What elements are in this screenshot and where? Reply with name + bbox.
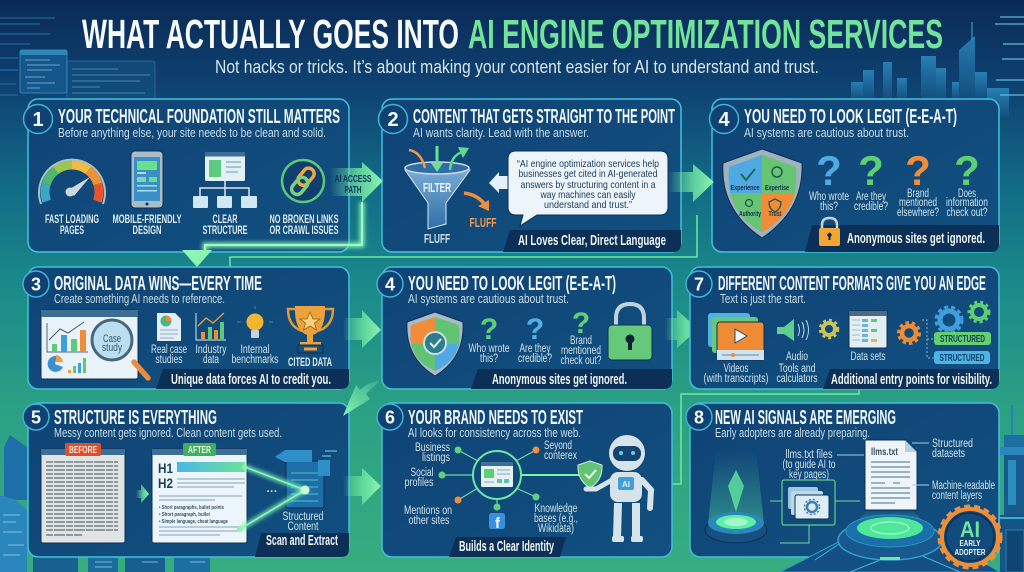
arrow: panel 4 to panel 7 [665, 310, 698, 348]
label: internal benchmarks: benchmarks [232, 354, 279, 366]
panel: 7 content formats [686, 267, 999, 389]
question: brand mentioned: ? [905, 147, 931, 194]
question: information check: check out? [946, 207, 988, 219]
label: tools and calculators: Tools and [778, 363, 816, 375]
node: social profiles [404, 467, 446, 489]
question: who wrote this: Who wrote [809, 191, 849, 203]
label: industry data: Industry [196, 344, 227, 356]
icon: data sets table [849, 311, 887, 348]
arrow: panel 5 to panel 6 [343, 468, 381, 505]
label: clear structure: STRUCTURE [202, 223, 248, 237]
question: brand mentioned: mentioned [561, 345, 601, 357]
icon: llms.txt document [865, 440, 917, 510]
question: who wrote this: this? [480, 353, 498, 365]
icon: filter funnel: FILTER [423, 180, 451, 195]
label: llms.txt files: llms.txt files [786, 449, 833, 461]
footer band 6: Builds a Clear Identity [459, 538, 554, 555]
heading 6: YOUR BRAND NEEDS TO EXIST [408, 407, 583, 429]
node: seyond conterex [532, 440, 577, 462]
after window: • Short paragraphs, bullet points [159, 505, 224, 511]
question: brand mentioned [560, 307, 602, 367]
label: llms.txt files: (to guide AI to [782, 459, 836, 471]
footer band 5 [255, 532, 349, 557]
icon: E-E-A-T shield: Experience [730, 183, 760, 192]
subheading 8: Early adopters are already preparing. [715, 426, 870, 440]
question: information check: information [946, 197, 988, 209]
number 4: 4 [385, 274, 395, 294]
subheading 1: Before anything else, your site needs to be clean and solid. [58, 126, 326, 140]
heading 2: CONTENT THAT GETS STRAIGHT TO THE POINT [413, 106, 675, 128]
number 6: 6 [385, 408, 395, 428]
number 6 [377, 404, 403, 430]
node: knowledge bases: Knowledge [534, 503, 578, 515]
badge: AI early adopter: AI [960, 517, 980, 542]
label: llms.txt files: key pages) [789, 469, 829, 481]
label: structured datasets: Structured [932, 438, 973, 450]
panel: 5 structure [23, 403, 349, 557]
heading 1: YOUR TECHNICAL FOUNDATION STILL MATTERS [58, 106, 340, 128]
question: who wrote this: ? [816, 147, 842, 194]
question: brand mentioned [897, 147, 939, 219]
label: mobile-friendly design [112, 212, 182, 237]
label: real case studies: Real case [151, 344, 187, 356]
node: business listings [415, 442, 462, 464]
number 2 [378, 104, 408, 134]
label: videos [704, 363, 769, 385]
label: structured content: Structured [282, 511, 324, 523]
label: machine-readable content layers: content layers [932, 490, 982, 502]
label: fluff orange: FLUFF [470, 215, 497, 230]
label: internal benchmarks: Internal [240, 344, 270, 356]
label: machine-readable content layers [912, 480, 995, 502]
node: business listings: Business [415, 442, 450, 454]
callout: speech bubble quote: understand and trust.” [544, 199, 632, 211]
node: mentions on other sites: Mentions on [404, 505, 452, 517]
footer band 4 [805, 225, 999, 252]
icon: audio speaker [777, 319, 808, 341]
node: social profiles: profiles [404, 477, 434, 489]
question: who wrote this: this? [820, 201, 838, 213]
icon: E-E-A-T shield: Trust [768, 209, 782, 218]
badge: AI early adopter: EARLY [960, 538, 981, 548]
callout: speech bubble quote: answers by structuring content in a [520, 179, 656, 191]
arrow: panel 2 to panel 4 [668, 164, 714, 202]
node: seyond conterex: Seyond [544, 440, 572, 452]
icon: case study report: Case [103, 333, 121, 345]
heading 5: STRUCTURE IS EVERYTHING [54, 407, 217, 429]
label: audio: Audio [786, 351, 808, 363]
label: llms.txt files [782, 449, 864, 481]
label: real case studies [151, 344, 187, 366]
panel: 1 technical foundation [24, 99, 349, 252]
footer band 3: Unique data forces AI to credit you. [171, 371, 331, 388]
question: are they credible: ? [526, 313, 544, 346]
icon: E-E-A-T shield: Expertise [765, 183, 789, 192]
icon: trophy [288, 306, 333, 353]
number 8 [686, 404, 712, 430]
question: information check: Does [958, 188, 976, 200]
node: knowledge bases: Wikidata) [538, 523, 574, 535]
decoration: tower bottom right [1000, 405, 1024, 572]
label: no broken links: OR CRAWL ISSUES [270, 223, 338, 237]
question: brand mentioned: mentioned [899, 197, 937, 209]
question: information check: ? [954, 147, 980, 194]
arrow: access path to panel 2 [330, 162, 383, 202]
icon: E-E-A-T shield: Authority [739, 209, 762, 218]
subheading 2: AI wants clarity. Lead with the answer. [413, 126, 589, 140]
question: brand mentioned: check out? [560, 355, 602, 367]
badge: AI early adopter: ADOPTER [954, 547, 986, 557]
number 7: 7 [694, 274, 704, 294]
number 4: 4 [718, 109, 730, 131]
question: brand mentioned: Brand [570, 335, 592, 347]
badge: structured blue: STRUCTURED [940, 353, 984, 364]
icon: filter funnel [405, 146, 489, 229]
label: fast loading pages [45, 212, 99, 237]
subheading 3: Create something AI needs to reference. [54, 292, 225, 306]
connector: thin lines between panels [230, 215, 859, 484]
label: mobile-friendly design: DESIGN [132, 223, 162, 237]
subheading 7: Text is just the start. [720, 292, 806, 306]
callout: speech bubble quote: businesses get cited in AI-generated [518, 168, 658, 180]
panel: 2 straight to the point [378, 99, 681, 252]
node: seyond conterex: conterex [544, 450, 577, 462]
question: are they credible: Are they [856, 191, 886, 203]
subheading 4: AI systems are cautious about trust. [408, 292, 569, 306]
after window: • Short paragraph, bullet [159, 512, 210, 518]
icon: case study report [41, 310, 148, 379]
label: internal benchmarks [232, 344, 279, 366]
badge: before [65, 443, 101, 456]
label: fast loading pages: FAST LOADING [45, 212, 99, 226]
icon: robot with shield: AI [622, 480, 630, 489]
question: brand mentioned: Brand [907, 188, 929, 200]
arrow: access path down to panel 3 [182, 202, 362, 267]
number 5 [23, 404, 49, 430]
number 7 [686, 271, 712, 297]
after window: • Simple language, cheat language [159, 519, 228, 525]
before window [41, 449, 125, 543]
label: structured content [282, 511, 324, 533]
panel: 4 look legit middle [377, 267, 672, 389]
number 1 [24, 104, 52, 134]
icon: case studies document [157, 313, 181, 341]
footer band 3 [156, 369, 349, 389]
label: machine-readable content layers: Machine-readable [932, 480, 995, 492]
node: business listings: listings [422, 452, 450, 464]
question: who wrote this: ? [480, 313, 498, 346]
decoration: city bottom left [0, 435, 210, 572]
label: cited data: CITED DATA [288, 355, 332, 369]
badge: structured green: STRUCTURED [940, 334, 985, 345]
icon: website hub [473, 451, 521, 499]
arrow: access path to panel 2: PATH [344, 185, 362, 196]
icon: orange lock [819, 218, 840, 246]
decoration: code windows top left [0, 18, 155, 101]
label: industry data [196, 344, 227, 366]
number 5: 5 [31, 408, 41, 428]
icon: gears [898, 302, 989, 358]
question: who wrote this [468, 313, 510, 365]
after window: H2 [158, 476, 173, 491]
question: are they credible: credible? [854, 201, 888, 213]
icon: scanner [266, 450, 337, 508]
platform: hub base [780, 510, 1000, 572]
badge: structured blue [934, 351, 990, 364]
badge: before: BEFORE [69, 444, 97, 456]
label: fast loading pages: PAGES [60, 223, 84, 237]
footer band 2: AI Loves Clear, Direct Language [518, 232, 666, 249]
icon: E-E-A-T shield [723, 149, 802, 238]
icon: robot with shield [578, 435, 651, 542]
question: are they credible: credible? [518, 353, 552, 365]
question: brand mentioned: ? [572, 307, 590, 340]
icon: speed gauge [39, 160, 105, 204]
icon: case study report: study [102, 342, 122, 354]
footer band 4: Anonymous sites get ignored. [492, 371, 627, 388]
label: tools and calculators: calculators [776, 373, 818, 385]
icon: crystal platform [705, 450, 767, 543]
scan beams [237, 464, 310, 532]
question: are they credible: ? [858, 147, 884, 194]
title [82, 11, 943, 57]
panel: 8 new AI signals [686, 403, 1001, 572]
heading 4: YOU NEED TO LOOK LEGIT (E-E-A-T) [408, 273, 616, 295]
title: WHAT ACTUALLY GOES INTO [82, 11, 459, 57]
icon: facebook [489, 504, 505, 532]
label: industry data: data [203, 354, 219, 366]
node: knowledge bases: bases (e.g., [534, 513, 578, 525]
footer band 4 [471, 369, 672, 389]
icon: industry data chart [196, 313, 226, 340]
badge: after [183, 443, 216, 456]
subheading 4: AI systems are cautious about trust. [744, 126, 909, 140]
arrow: panel 3 to panel 4 [343, 310, 381, 348]
icon: light bulb [237, 306, 273, 338]
after window: H1 [158, 461, 173, 476]
panel: 3 original data [23, 267, 349, 389]
node: mentions on other sites: other sites [408, 515, 450, 527]
decoration: city skyline top right [851, 17, 1024, 118]
icon: arrow to funnel [489, 172, 509, 193]
number 3 [23, 271, 49, 297]
number 8: 8 [694, 408, 704, 428]
label: structured datasets: datasets [932, 448, 965, 460]
callout: speech bubble quote: way machines can easily [540, 189, 636, 201]
footer band 2 [503, 230, 681, 252]
label: structured content: Content [288, 521, 319, 533]
label: clear structure [202, 212, 248, 237]
label: videos: (with transcripts) [704, 373, 769, 385]
subheading 5: Messy content gets ignored. Clean content gets used. [54, 426, 282, 440]
icon: mobile phone [131, 151, 163, 208]
after window [152, 449, 247, 543]
node: knowledge bases [532, 494, 578, 535]
callout: speech bubble quote [508, 151, 668, 226]
icon: green padlock [608, 304, 652, 360]
question: information check [946, 147, 988, 219]
brand network lines [442, 450, 585, 507]
icon: scanner: ··· [266, 486, 278, 498]
number 3: 3 [31, 274, 41, 294]
footer band 5: Scan and Extract [266, 532, 338, 549]
badge: after: AFTER [188, 444, 211, 456]
badge: structured green [934, 332, 991, 345]
node: social profiles: Social [410, 467, 434, 479]
question: brand mentioned: elsewhere? [897, 207, 939, 219]
icon: site structure [193, 152, 257, 208]
subheading 6: AI looks for consistency across the web. [408, 426, 581, 440]
subtitle: Not hacks or tricks. It’s about making your content easier for AI to understand and trust. [215, 57, 819, 77]
question: who wrote this: Who wrote [468, 343, 510, 355]
label: tools and calculators [776, 363, 818, 385]
icon: video stack [708, 313, 764, 360]
label: mobile-friendly design: MOBILE-FRIENDLY [112, 212, 182, 226]
heading 3: ORIGINAL DATA WINS—EVERY TIME [54, 273, 262, 295]
footer band 6 [449, 537, 566, 557]
icon: facebook: f [495, 515, 501, 532]
arrow: back to panel 5 [343, 380, 381, 416]
question: who wrote this [809, 147, 849, 213]
number 1: 1 [32, 109, 44, 131]
node: mentions on other sites [404, 496, 462, 527]
icon: check shield [407, 312, 463, 376]
icon: llms.txt document: llms.txt [871, 446, 898, 458]
label: fluff: FLUFF [424, 231, 450, 246]
panel: 6 brand [377, 403, 672, 557]
number 4 [377, 271, 403, 297]
label: clear structure: CLEAR [212, 212, 238, 226]
label: no broken links: NO BROKEN LINKS [270, 212, 338, 226]
label: videos: Videos [724, 363, 749, 375]
icon: chain link [282, 160, 324, 202]
badge: AI early adopter [939, 506, 1001, 568]
question: are they credible [518, 313, 552, 365]
question: are they credible: Are they [520, 343, 551, 355]
icon: tool gear [820, 320, 838, 338]
number 4 [710, 104, 738, 134]
arrow: access path to panel 2: AI ACCESS [334, 174, 372, 185]
panel: 4 look legit top [710, 99, 999, 252]
label: no broken links [270, 212, 338, 237]
callout: speech bubble quote: “AI engine optimization services help [517, 158, 659, 170]
question: are they credible [854, 147, 888, 213]
label: structured datasets [912, 438, 973, 460]
arrow: before to after [136, 484, 149, 503]
icon: folder stack [770, 480, 860, 543]
label: data sets: Data sets [850, 351, 886, 363]
label: real case studies: studies [156, 354, 183, 366]
number 2: 2 [387, 109, 399, 131]
